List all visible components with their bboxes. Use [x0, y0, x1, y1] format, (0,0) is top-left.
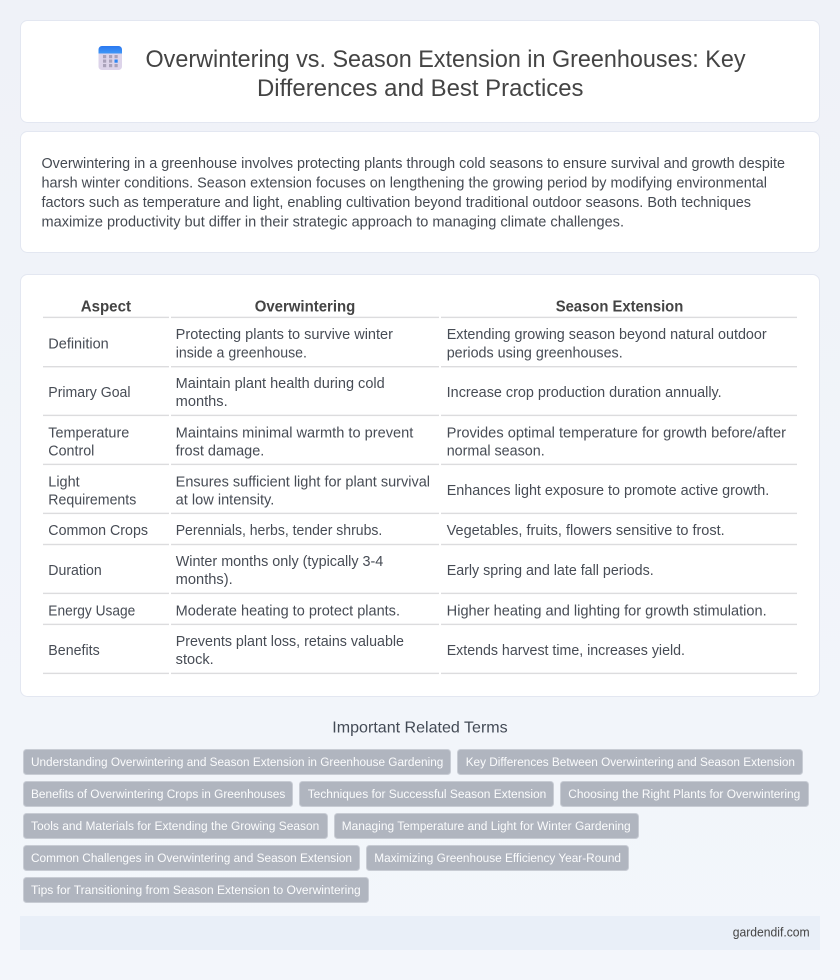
tag row 3	[24, 814, 638, 838]
row: benefits	[48, 634, 685, 668]
table header row: Season Extension	[556, 298, 683, 316]
row: duration: Early spring and late fall periods.	[447, 563, 654, 579]
row: primary goal	[48, 376, 722, 410]
tag row 2: Choosing the Right Plants for Overwintering	[568, 787, 800, 801]
row: energy usage: Moderate heating to protect plants.	[176, 603, 400, 619]
row: definition: Definition	[48, 336, 109, 352]
panel: comparison table	[20, 274, 820, 696]
row: common crops: Perennials, herbs, tender shrubs.	[176, 523, 382, 539]
row: primary goal: months.	[176, 394, 228, 410]
row: primary goal: Maintain plant health during cold	[176, 376, 385, 392]
row: definition: periods using greenhouses.	[447, 345, 623, 361]
row: primary goal: Primary Goal	[48, 385, 130, 401]
row: common crops	[48, 523, 725, 539]
table header row: Aspect	[81, 298, 132, 316]
related term tags	[24, 750, 808, 902]
row: definition: Protecting plants to survive winter	[176, 327, 393, 343]
row: light requirements: Enhances light exposure to promote active growth.	[447, 483, 769, 499]
table header row: Overwintering	[255, 298, 355, 316]
row: light requirements: Ensures sufficient light for plant survival	[176, 474, 430, 490]
title: Overwintering vs. Season Extension in Greenhouses: Key	[146, 46, 746, 73]
row: light requirements: Light	[48, 474, 80, 490]
intro text block: factors such as temperature and light, enabling cultivation beyond traditional outdoor seasons. Both techniques	[42, 195, 751, 211]
tag row 2: Techniques for Successful Season Extension	[308, 787, 546, 801]
tag row 2	[24, 782, 808, 806]
tag row 3: Tools and Materials for Extending the Growing Season	[31, 819, 319, 833]
table header row	[81, 298, 683, 316]
row: common crops: Vegetables, fruits, flowers sensitive to frost.	[447, 523, 725, 539]
row: light requirements	[48, 474, 769, 508]
row: temperature control: Temperature	[48, 425, 129, 441]
row: benefits: Prevents plant loss, retains valuable	[176, 634, 404, 650]
panel: title header	[20, 20, 820, 122]
row: definition	[48, 327, 767, 361]
heading: important related terms: Important Related Terms	[332, 719, 508, 736]
row: energy usage: Energy Usage	[48, 603, 135, 619]
title: Differences and Best Practices	[257, 75, 584, 102]
intro text block: Overwintering in a greenhouse involves protecting plants through cold seasons to ensure survival and growth despite	[42, 156, 785, 172]
row: light requirements: at low intensity.	[176, 492, 274, 508]
row: temperature control: normal season.	[447, 443, 545, 459]
row: energy usage	[48, 603, 767, 619]
row: benefits: stock.	[176, 652, 214, 668]
intro text block	[42, 156, 785, 230]
tag row 4: Maximizing Greenhouse Efficiency Year-Round	[374, 851, 621, 865]
row: definition: inside a greenhouse.	[176, 345, 307, 361]
tag row 5	[24, 878, 368, 902]
panel: introduction	[20, 132, 820, 252]
footer bar	[20, 916, 820, 950]
row: common crops: Common Crops	[48, 523, 148, 539]
intro text block: harsh winter conditions. Season extension focuses on lengthening the growing period by modifying environmental	[42, 176, 767, 192]
row: duration: Duration	[48, 563, 102, 579]
row: duration: Winter months only (typically 3-4	[176, 554, 383, 570]
icon: calendar	[98, 46, 122, 70]
row: benefits: Benefits	[48, 643, 100, 659]
footer source: gardendif.com	[733, 926, 810, 940]
row: temperature control: Provides optimal temperature for growth before/after	[447, 425, 786, 441]
row: temperature control: Control	[48, 443, 94, 459]
intro text block: maximize productivity but differ in their strategic approach to managing climate challenges.	[42, 214, 624, 230]
title	[146, 46, 746, 102]
row: duration: months).	[176, 572, 233, 588]
row: primary goal: Increase crop production duration annually.	[447, 385, 722, 401]
row: light requirements: Requirements	[48, 492, 136, 508]
row: temperature control	[48, 425, 786, 459]
tag row 5: Tips for Transitioning from Season Extension to Overwintering	[31, 883, 361, 897]
tag row 3: Managing Temperature and Light for Winter Gardening	[342, 819, 631, 833]
row: temperature control: Maintains minimal warmth to prevent	[176, 425, 413, 441]
row: temperature control: frost damage.	[176, 443, 264, 459]
tag row 2: Benefits of Overwintering Crops in Greenhouses	[31, 787, 285, 801]
tag row 4: Common Challenges in Overwintering and Season Extension	[31, 851, 352, 865]
tag row 4	[24, 846, 628, 870]
row: duration	[48, 554, 654, 588]
row: benefits: Extends harvest time, increases yield.	[447, 643, 685, 659]
tag row 1: Key Differences Between Overwintering and Season Extension	[466, 755, 795, 769]
tag row 1	[24, 750, 802, 774]
row: definition: Extending growing season beyond natural outdoor	[447, 327, 767, 343]
tag row 1: Understanding Overwintering and Season Extension in Greenhouse Gardening	[31, 755, 443, 769]
row: energy usage: Higher heating and lighting for growth stimulation.	[447, 603, 767, 619]
